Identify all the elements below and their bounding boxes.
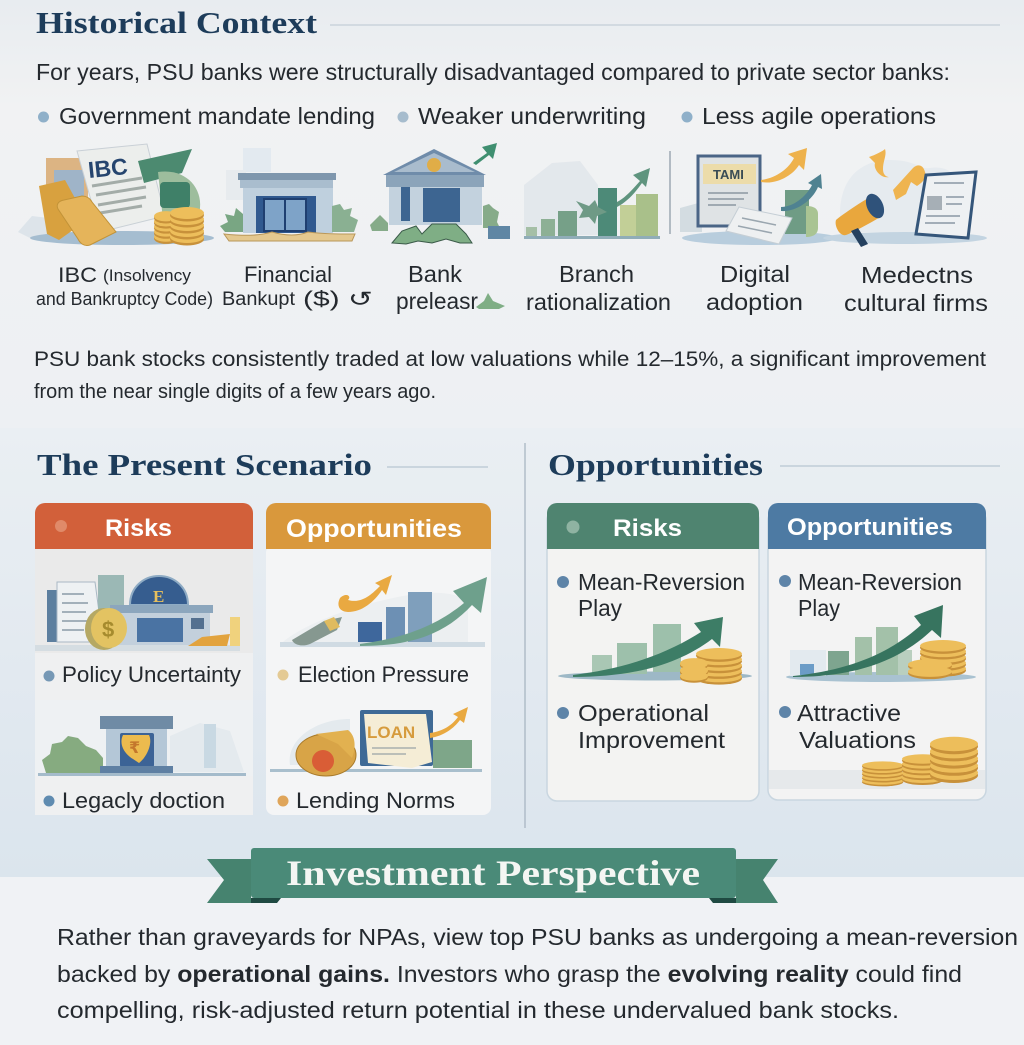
captions for icons: preleasr (396, 288, 478, 314)
item: operational improvement: Operational (578, 700, 709, 726)
bullet list of disadvantages: Weaker underwriting (418, 103, 646, 129)
icon: policy document, coin and bank: $ (102, 617, 114, 642)
item: attractive valuations: Valuations (799, 727, 916, 753)
section: the present scenario (35, 447, 491, 815)
captions for icons: IBC (58, 264, 97, 287)
captions for icons (36, 261, 988, 316)
risks header (35, 503, 253, 549)
icon: IBC document with gold and coins (18, 144, 214, 246)
icon: loan document and gold shield: LOAN (367, 723, 415, 742)
captions for icons: and Bankruptcy Code) (36, 289, 213, 309)
item: operational improvement: Improvement (578, 727, 726, 753)
valuation paragraph (34, 348, 986, 403)
heading: the present scenario: The Present Scenario (37, 447, 372, 482)
icon: digital adoption document and arrows: TAMI (713, 167, 744, 182)
green card header (547, 503, 759, 549)
item: mean-reversion play: Mean-Reversion (578, 569, 745, 595)
green card header: Risks (613, 515, 682, 542)
captions for icons: Financial (244, 262, 332, 287)
captions for icons: (Insolvency (103, 266, 192, 285)
icon: policy document, coin and bank (35, 575, 240, 651)
icon: three coin stacks (862, 737, 978, 786)
conclusion paragraph: compelling, risk-adjusted return potential in these undervalued bank stocks. (57, 997, 899, 1023)
blue card header (768, 503, 986, 549)
item: mean-reversion play: Play (578, 595, 622, 621)
chart: rising bars, arrow and coins (558, 617, 752, 685)
captions for icons: Digital (720, 261, 790, 287)
icon: branch rationalization bar chart (524, 151, 670, 239)
item: mean-reversion play: Mean-Reversion (798, 569, 962, 595)
conclusion paragraph: Rather than graveyards for NPAs, view top PSU banks as undergoing a mean-reversion (57, 924, 1018, 950)
captions for icons: adoption (706, 289, 803, 315)
icon: bank with rising arrow and green rocks (370, 143, 510, 244)
icon: IBC document with gold and coins: IBC (87, 153, 129, 183)
icon: policy document, coin and bank: E (153, 587, 164, 606)
panel: risks (35, 503, 253, 815)
captions for icons: Bankupt (222, 289, 296, 310)
captions for icons: Medectns (861, 262, 973, 288)
opportunity: election pressure: Election Pressure (298, 662, 469, 687)
opportunities header (266, 503, 491, 549)
bullet list of disadvantages (38, 103, 936, 129)
icon: pen and rising bars (280, 575, 487, 647)
item: operational improvement (557, 700, 726, 753)
opportunities header: Opportunities (286, 515, 462, 543)
icon: bank building with plants (220, 148, 358, 241)
valuation paragraph: from the near single digits of a few years ago. (34, 381, 436, 403)
blue card header: Opportunities (787, 514, 953, 541)
bullet list of disadvantages: Less agile operations (702, 103, 936, 129)
item: mean-reversion play: Play (798, 595, 840, 621)
icon: bank with rupee shield (38, 716, 246, 776)
icon: bank with rupee shield: ₹ (129, 740, 140, 757)
bullet list of disadvantages: Government mandate lending (59, 103, 375, 129)
panel: opportunities (266, 503, 491, 815)
heading: opportunities: Opportunities (548, 447, 763, 482)
icon: digital adoption document and arrows (680, 148, 838, 245)
risks header: Risks (105, 515, 172, 542)
opportunity: lending norms: Lending Norms (296, 788, 455, 813)
conclusion paragraph (57, 924, 1018, 1023)
valuation paragraph: PSU bank stocks consistently traded at low valuations while 12–15%, a significant improvement (34, 348, 986, 371)
intro sentence: For years, PSU banks were structurally disadvantaged compared to private sector banks: (36, 59, 950, 85)
section: historical context (18, 5, 1000, 403)
item: mean-reversion play (779, 569, 962, 621)
heading: historical context: Historical Context (36, 5, 318, 40)
captions for icons: rationalization (526, 289, 671, 315)
item: attractive valuations: Attractive (797, 700, 901, 726)
captions for icons: ($) ↺ (303, 288, 373, 311)
divider between columns (524, 443, 526, 828)
panel: blue opportunities card (768, 503, 986, 800)
risk: policy uncertainty: Policy Uncertainty (62, 662, 242, 687)
icon: megaphone and tablet (823, 149, 987, 247)
ground wash (769, 770, 985, 789)
risk: legacy doction: Legacly doction (62, 788, 225, 813)
banner: investment perspective (207, 848, 778, 903)
item: mean-reversion play (557, 569, 745, 621)
ribbon tails (207, 859, 778, 903)
panel: green risks card (547, 503, 759, 801)
item: attractive valuations (779, 700, 916, 753)
banner title: Investment Perspective (286, 853, 700, 893)
captions for icons: Bank (408, 261, 463, 287)
section: opportunities (547, 447, 1000, 801)
icon: loan document and gold shield (270, 707, 482, 776)
conclusion paragraph: backed by operational gains. Investors who grasp the evolving reality could find (57, 961, 962, 987)
captions for icons: Branch (559, 261, 634, 287)
captions for icons: cultural firms (844, 290, 988, 316)
chart: rising bars, arrow and coins (786, 605, 976, 682)
